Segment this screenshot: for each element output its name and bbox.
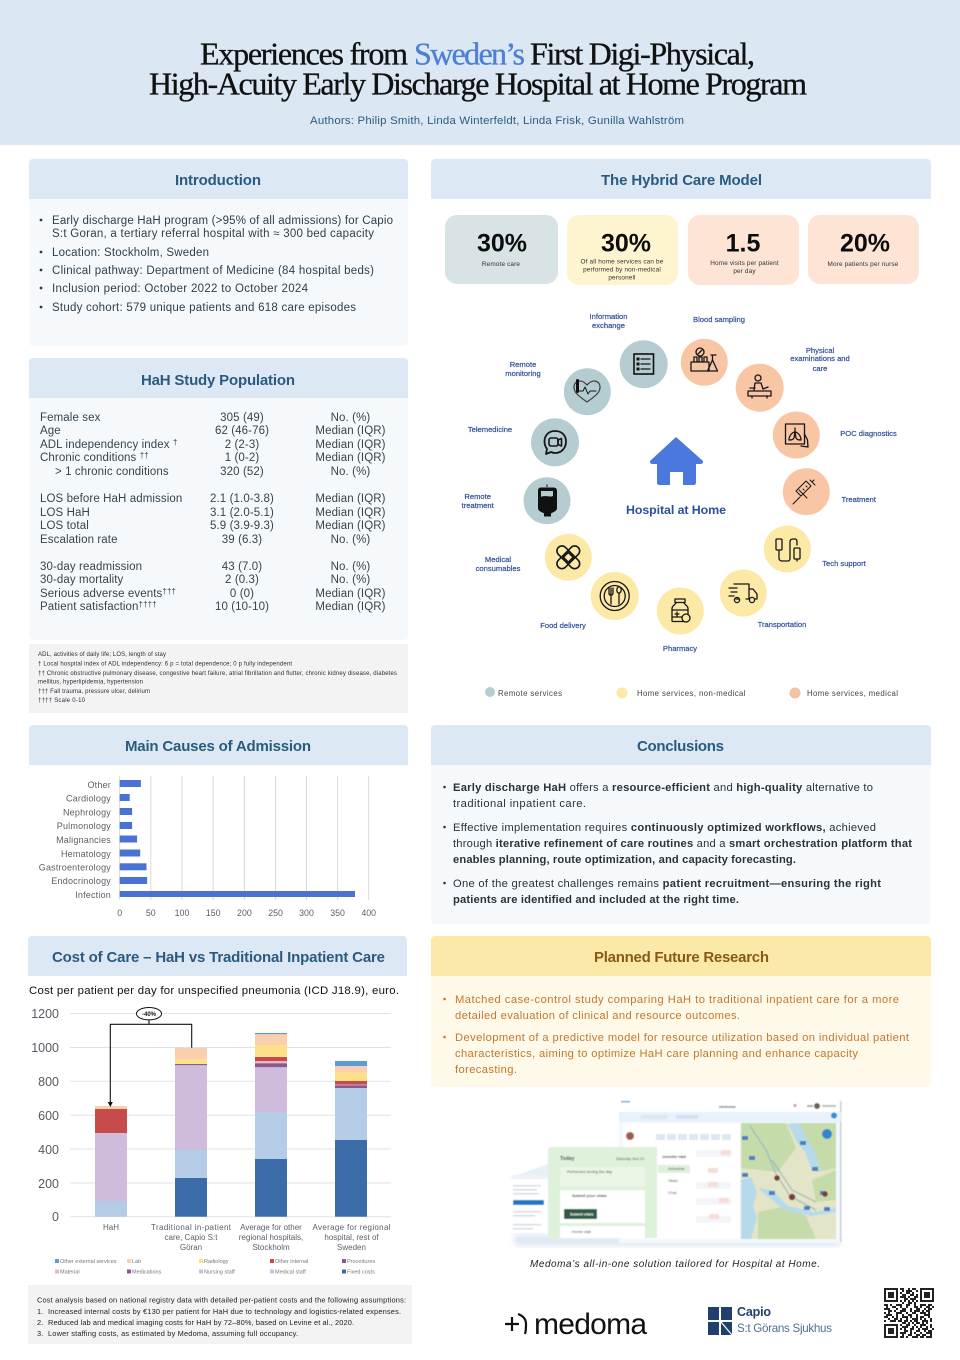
heading: main causes: Main Causes of Admission (125, 738, 311, 755)
footnotes: study population (29, 644, 408, 713)
table: study population: Median (IQR) (315, 425, 386, 437)
service: information exchange (590, 312, 668, 388)
panel: hybrid care model (431, 159, 931, 698)
bar chart: main causes: Hematology (61, 849, 111, 859)
stacked bar chart: cost per patient: 1000 (31, 1041, 59, 1055)
table: study population: †††† (139, 600, 157, 609)
table: study population: 39 (6.3) (222, 534, 262, 546)
service: remote monitoring: monitoring (505, 369, 541, 378)
footnotes: study population: ††† Fall trauma, pressure ulcer, delirium (38, 689, 150, 695)
service: POC diagnostics: POC diagnostics (840, 429, 897, 438)
service: information exchange: Information (590, 312, 628, 321)
panel: conclusions (431, 725, 931, 924)
panel: planned future research (431, 936, 931, 1087)
chart legend: Other external services (60, 1259, 117, 1265)
chart legend: Lab (132, 1259, 141, 1265)
legend: service types: Remote services (498, 689, 562, 698)
service: medical consumables: consumables (476, 564, 521, 573)
logo: medoma: medoma (534, 1308, 647, 1341)
bullet list: conclusions: through iterative refinement of care routines and a smart orchestration platform that (453, 838, 912, 850)
stat card: patients per nurse: 20% (840, 230, 890, 258)
stat card: patients per nurse: More patients per nurse (828, 261, 899, 268)
table: study population: Escalation rate (40, 534, 118, 546)
bullet list: conclusions: Early discharge HaH offers a resource-efficient and high-quality alternative to (453, 782, 873, 794)
bar: HaH (95, 1106, 127, 1217)
tablet today view: Submit vitals (570, 1212, 594, 1216)
table: study population: Median (IQR) (315, 493, 386, 505)
stat card: non-medical personnel: 30% (601, 230, 651, 258)
tablet today view: Submit your vitals (572, 1193, 607, 1198)
bar: other regional hospitals, Stockholm (255, 1033, 287, 1217)
title (149, 36, 807, 102)
logo: Capio S:t Görans Sjukhus: S:t Görans Sjukhus (737, 1322, 832, 1335)
title: First Digi-Physical, (530, 36, 755, 72)
stacked bar chart: cost per patient: 200 (38, 1177, 59, 1191)
service: information exchange: exchange (592, 321, 625, 330)
service: transportation: Transportation (758, 620, 806, 629)
heading: planned future research: Planned Future Research (594, 949, 769, 966)
bracket: -40% comparison: -40% (142, 1012, 157, 1018)
QR code (884, 1289, 934, 1337)
title: Sweden’s (414, 36, 525, 72)
chart legend: Nursing staff (204, 1270, 235, 1276)
tablet today view: Jennifer Hall (662, 1154, 686, 1159)
bullet list: introduction (40, 215, 393, 314)
heading: introduction: Introduction (175, 172, 261, 189)
bullet list: future research (443, 994, 910, 1076)
stacked bar chart: cost per patient: Stockholm (252, 1243, 290, 1252)
screenshot caption: Medoma’s all-in-one solution tailored for Hospital at Home. (530, 1259, 820, 1270)
table: study population: ††† (162, 587, 176, 596)
stat card: home visits: per day (733, 268, 756, 275)
table: study population: †† (140, 451, 149, 460)
bullet list: conclusions: enables planning, route optimization, and capacity forecasting. (453, 854, 796, 866)
stacked bar chart: cost per patient: care, Capio S:t (165, 1233, 218, 1242)
panel: HaH study population (29, 358, 408, 640)
bullet list: future research: Development of a predictive model for resource utilization based on individual patient (455, 1032, 910, 1044)
stacked bar chart: cost per patient: Göran (180, 1243, 202, 1252)
map (741, 1123, 836, 1239)
bar: regional hospital, rest of Sweden (335, 1061, 367, 1217)
bar chart: main causes: 250 (268, 908, 283, 918)
bar chart: main causes (39, 776, 376, 918)
table: study population: 10 (10-10) (215, 601, 269, 613)
bullet list: conclusions (443, 782, 912, 906)
stat card: non-medical personnel: personell (608, 274, 636, 282)
service: remote monitoring (505, 360, 611, 415)
table: study population: ADL independency index (40, 439, 170, 451)
table: study population: Median (IQR) (315, 520, 386, 532)
bullet list: introduction: Inclusion period: October 2022 to October 2024 (52, 283, 309, 295)
legend: service types: Home services, medical (807, 689, 898, 698)
service: pharmacy: Pharmacy (663, 644, 697, 653)
table: study population: 320 (52) (220, 466, 264, 478)
chart subtitle: Cost per patient per day for unspecified pneumonia (ICD J18.9), euro. (29, 985, 399, 997)
footnotes: study population: † Local hospital index of ADL independency: 6 p = total dependence; 0 p fully independent (38, 662, 292, 668)
table: study population: Age (40, 425, 61, 437)
table: study population: 30-day readmission (40, 561, 142, 573)
service: medical consumables (476, 534, 592, 581)
table: study population: Serious adverse events (40, 588, 162, 600)
stacked bar chart: cost per patient: Average for other (240, 1223, 302, 1232)
service: treatment: Treatment (842, 495, 877, 504)
table: study population: Patient satisfaction (40, 601, 139, 613)
bar chart: main causes: Other (87, 780, 111, 790)
bar chart: main causes: Cardiology (66, 794, 111, 804)
tablet today view: Performed during the day (567, 1169, 612, 1174)
legend: service types (485, 687, 898, 698)
tablet today view: Home visit (572, 1229, 592, 1234)
chart legend: Medical staff (275, 1270, 306, 1276)
chart legend: Medications (132, 1270, 162, 1276)
table: study population: Median (IQR) (315, 452, 386, 464)
chart legend: Other internal (275, 1259, 308, 1265)
stacked bar chart: cost per patient: Sweden (337, 1243, 366, 1252)
header banner (0, 0, 960, 145)
service: remote treatment (462, 477, 570, 524)
cost assumptions note: 3. (37, 1329, 43, 1338)
table: study population: 5.9 (3.9-9.3) (210, 520, 274, 532)
service: telemedicine: Telemedicine (468, 425, 512, 434)
title: High-Acuity Early Discharge Hospital at Home Program (149, 66, 807, 102)
cost assumptions note: Lower staffing costs, as estimated by Medoma, assuming full occupancy. (48, 1329, 298, 1338)
bar chart: main causes: 350 (330, 908, 345, 918)
table: study population: 2 (2-3) (225, 439, 259, 451)
table: study population: 3.1 (2.0-5.1) (210, 507, 274, 519)
tablet today view: Saturday Nov 22 (616, 1157, 644, 1161)
stat card: remote care: Remote care (482, 261, 520, 268)
bar chart: main causes: Pulmonology (57, 821, 111, 831)
bullet list: conclusions: patients are identified and included at the right time. (453, 894, 739, 906)
table: study population: No. (%) (331, 561, 370, 573)
table: study population: 43 (7.0) (222, 561, 262, 573)
bullet list: introduction: Location: Stockholm, Sweden (52, 247, 209, 259)
stat card: remote care: 30% (477, 230, 527, 258)
stat card: non-medical personnel (567, 215, 678, 285)
table: study population: LOS total (40, 520, 89, 532)
logo: Capio S:t Görans Sjukhus (708, 1305, 832, 1335)
cost assumptions note: 2. (37, 1318, 43, 1327)
service: pharmacy (657, 588, 704, 653)
service: remote treatment: Remote (464, 492, 491, 501)
footnotes: study population: ADL, activities of daily life; LOS, length of stay (38, 652, 166, 658)
service: tech support: Tech support (822, 559, 867, 568)
phone view (509, 1153, 550, 1240)
service: transportation (720, 570, 806, 629)
chart legend: Procedures (347, 1259, 375, 1265)
bar chart: main causes: Malignancies (56, 835, 111, 845)
chart legend (55, 1259, 375, 1276)
table: study population: No. (%) (331, 466, 370, 478)
service: treatment (783, 468, 877, 515)
stat card: non-medical personnel: Of all home services can be (581, 258, 664, 266)
cost assumptions note (28, 1285, 412, 1344)
service: medical consumables: Medical (485, 555, 511, 564)
stacked bar chart: cost per patient: regional hospitals, (239, 1233, 303, 1242)
table: study population: No. (%) (331, 534, 370, 546)
bar chart: main causes: Nephrology (63, 808, 111, 818)
stat card: remote care (445, 215, 558, 284)
footnotes: study population: mellitus, hyperlipidemia, hypertension (38, 680, 143, 686)
panel: introduction (29, 159, 408, 346)
tablet today view: Schedule (668, 1166, 685, 1171)
chart legend: Radiology (204, 1259, 229, 1265)
stacked bar chart: cost per patient: Traditional in-patient (151, 1223, 232, 1232)
stacked bar chart: cost per patient: 400 (38, 1143, 59, 1157)
stacked bar chart: cost per patient: 1200 (31, 1007, 59, 1021)
stacked bar chart: cost per patient (31, 1007, 391, 1252)
service: POC diagnostics (773, 412, 897, 458)
stacked bar chart: cost per patient: 800 (38, 1075, 59, 1089)
bullet list: future research: forecasting. (455, 1064, 517, 1076)
panel: cost of care (28, 936, 407, 1276)
desktop window with map: medoma (719, 1104, 736, 1109)
bar chart: main causes: Gastroenterology (39, 862, 111, 872)
service: food delivery (540, 572, 639, 630)
bar chart: main causes: 50 (146, 908, 156, 918)
cost assumptions note: 1. (37, 1307, 43, 1316)
bullet list: conclusions: traditional inpatient care. (453, 798, 586, 810)
table: study population (40, 412, 386, 613)
legend: service types: Home services, non-medical (637, 689, 746, 698)
bar: traditional in-patient care (175, 1048, 207, 1217)
bar chart: main causes: 150 (206, 908, 221, 918)
table: study population: LOS HaH (40, 507, 90, 519)
bar chart: main causes: 0 (117, 908, 122, 918)
heading: study population: HaH Study Population (141, 372, 295, 389)
stat card: home visits: 1.5 (726, 230, 760, 258)
tablet today view: Today (560, 1156, 575, 1162)
tablet today view: Chat (668, 1190, 677, 1195)
table: study population: 305 (49) (220, 412, 264, 424)
heading: cost of care: Cost of Care – HaH vs Traditional Inpatient Care (52, 949, 385, 966)
bar chart: main causes: 100 (175, 908, 189, 918)
chart legend: Material (60, 1270, 80, 1276)
stat card: home visits (688, 215, 799, 285)
service: physical examinations: examinations and (790, 354, 850, 363)
table: study population: Median (IQR) (315, 601, 386, 613)
table: study population: > 1 chronic conditions (55, 466, 169, 478)
stacked bar chart: cost per patient: 0 (52, 1210, 59, 1224)
product screenshot: Medoma solution (509, 1100, 842, 1246)
bar chart: main causes: 200 (237, 908, 252, 918)
heading: conclusions: Conclusions (637, 738, 724, 755)
table: study population: Median (IQR) (315, 507, 386, 519)
cost assumptions note: Increased internal costs by €130 per patient for HaH due to technology and logistics-related expenses. (48, 1307, 401, 1316)
bar chart: main causes: 300 (299, 908, 314, 918)
service: food delivery: Food delivery (540, 621, 586, 630)
table: study population: † (173, 438, 178, 447)
bullet list: introduction: Study cohort: 579 unique patients and 618 care episodes (52, 302, 356, 314)
stacked bar chart: cost per patient: 600 (38, 1109, 59, 1123)
stacked bar chart: cost per patient: hospital, rest of (324, 1233, 379, 1242)
desktop window with map (619, 1100, 842, 1243)
bullet list: introduction: Early discharge HaH program (>95% of all admissions) for Capio (52, 215, 393, 227)
service: blood sampling: Blood sampling (693, 315, 745, 324)
table: study population: 62 (46-76) (215, 425, 269, 437)
table: study population: 30-day mortality (40, 574, 124, 586)
bullet list: introduction: S:t Goran, a tertiary referral hospital with ≈ 300 bed capacity (52, 228, 374, 240)
authors: Authors: Philip Smith, Linda Winterfeldt, Linda Frisk, Gunilla Wahlström (310, 115, 684, 127)
table: study population: No. (%) (331, 574, 370, 586)
bullet list: conclusions: One of the greatest challenges remains patient recruitment—ensuring the right (453, 878, 881, 890)
bullet list: introduction: Clinical pathway: Department of Medicine (84 hospital beds) (52, 265, 374, 277)
footnotes: study population: †† Chronic obstructive pulmonary disease, congestive heart failure, atrial fibrillation and flutter, chronic kidney disease, diabetes (38, 671, 397, 677)
service: remote monitoring: Remote (510, 360, 536, 369)
table: study population: Median (IQR) (315, 588, 386, 600)
panel: main causes of admission (29, 725, 408, 918)
bar chart: main causes: Infection (75, 890, 111, 900)
table: study population: 2 (0.3) (225, 574, 259, 586)
bullet list: conclusions: Effective implementation requires continuously optimized workflows, achieved (453, 822, 876, 834)
table: study population: No. (%) (331, 412, 370, 424)
service: blood sampling (681, 315, 745, 386)
bar chart: main causes: Endocrinology (51, 876, 111, 886)
service: tech support (764, 526, 867, 572)
service: physical examinations (736, 346, 850, 412)
chart legend: Fixed costs (347, 1270, 375, 1276)
service: telemedicine (468, 418, 579, 466)
stat card: home visits: Home visits per patient (710, 260, 779, 267)
logo: Capio S:t Görans Sjukhus: Capio (737, 1305, 771, 1319)
tablet today view (548, 1147, 696, 1238)
bullet list: future research: detailed evaluation of clinical and resource outcomes. (455, 1010, 740, 1022)
service: remote treatment: treatment (462, 501, 495, 510)
bar chart: main causes: 400 (361, 908, 376, 918)
table: study population: 1 (0-2) (225, 452, 259, 464)
service: physical examinations: care (813, 364, 827, 373)
bracket: -40% comparison (108, 1008, 192, 1107)
heading: hybrid care model: The Hybrid Care Model (601, 172, 762, 189)
icon: house, Hospital at Home: Hospital at Home (626, 503, 726, 517)
table: study population: Chronic conditions (40, 452, 136, 464)
tablet today view: Vitals (668, 1178, 678, 1183)
stacked bar chart: cost per patient: HaH (103, 1223, 119, 1232)
table: study population: 0 (0) (230, 588, 254, 600)
table: study population: Female sex (40, 412, 101, 424)
icon: house, Hospital at Home (626, 437, 726, 517)
cost assumptions note: Reduced lab and medical imaging costs for HaH by 72–80%, based on Levine et al., 2020. (48, 1318, 354, 1327)
table: study population: LOS before HaH admission (40, 493, 182, 505)
service: physical examinations: Physical (806, 346, 834, 355)
table: study population: 2.1 (1.0-3.8) (210, 493, 274, 505)
footnotes: study population: †††† Scale 0-10 (38, 698, 86, 704)
bullet list: future research: characteristics, aiming to optimize HaH care planning and enhance capacity (455, 1048, 858, 1060)
cost assumptions note: Cost analysis based on national registry data with detailed per-patient costs and the following assumptions: (37, 1296, 406, 1304)
stacked bar chart: cost per patient: Average for regional (312, 1223, 391, 1232)
bullet list: future research: Matched case-control study comparing HaH to traditional inpatient care for a more (455, 994, 899, 1006)
stat card: patients per nurse (808, 215, 919, 284)
title: Experiences from (200, 36, 408, 72)
table: study population: Median (IQR) (315, 439, 386, 451)
stat card: non-medical personnel: performed by non-medical (583, 266, 661, 274)
